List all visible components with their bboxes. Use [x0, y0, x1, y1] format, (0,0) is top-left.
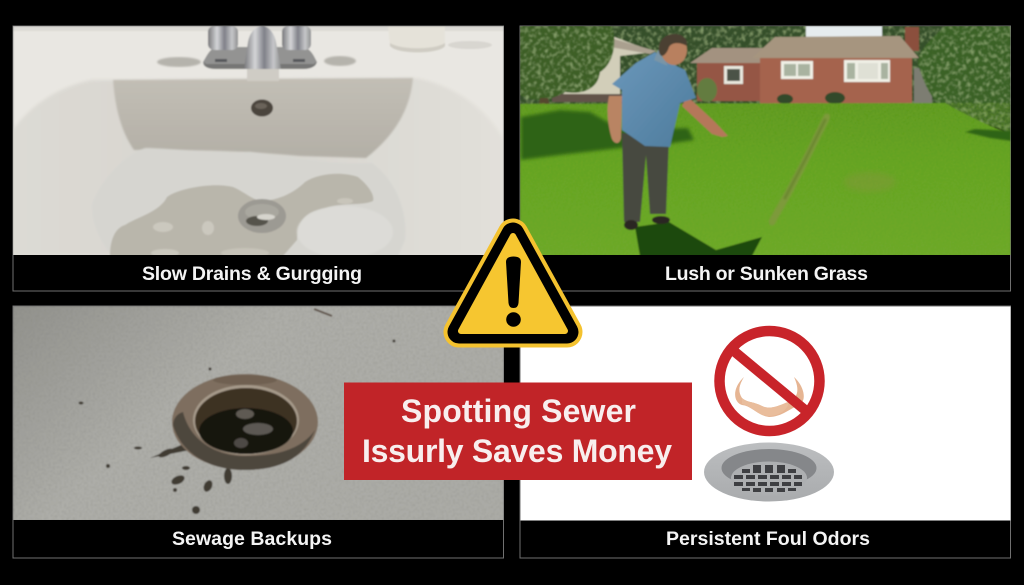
bubbles	[236, 409, 254, 419]
photo: sink with foamy standing water	[13, 26, 504, 258]
icon: faucet	[203, 26, 317, 69]
drain ring	[172, 374, 318, 470]
splatter	[78, 340, 396, 514]
trees	[520, 26, 614, 100]
soap dispenser	[389, 27, 444, 47]
banner: red title: Issurly Saves Money	[362, 433, 672, 469]
icon: yellow warning triangle	[459, 234, 567, 332]
icon: floor drain grate	[704, 442, 834, 502]
caption: persistent foul odors: Persistent Foul Odors	[666, 528, 870, 550]
panel: slow drains and gurgling	[13, 26, 504, 291]
lawn	[520, 103, 1011, 256]
left neighbouring house	[562, 36, 644, 96]
photo: man pointing at sunken strip in lawn	[520, 26, 1011, 256]
caption: sewage backups: Sewage Backups	[172, 528, 332, 550]
man	[608, 34, 762, 256]
panel: persistent foul odors	[520, 306, 1010, 558]
brick ranch house	[690, 48, 770, 64]
photo: overflowing floor drain on concrete	[13, 306, 504, 521]
icon: nose in prohibition sign	[720, 331, 820, 431]
sunken strip	[772, 117, 827, 222]
banner: red title: Spotting Sewer	[401, 393, 636, 429]
panel: sewage backups	[13, 306, 504, 558]
caption: slow drains: Slow Drains & Gurgging	[142, 263, 362, 285]
caption: lush or sunken grass: Lush or Sunken Grass	[665, 263, 868, 285]
banner: red title	[344, 382, 692, 480]
panel: lush or sunken grass	[520, 26, 1011, 291]
